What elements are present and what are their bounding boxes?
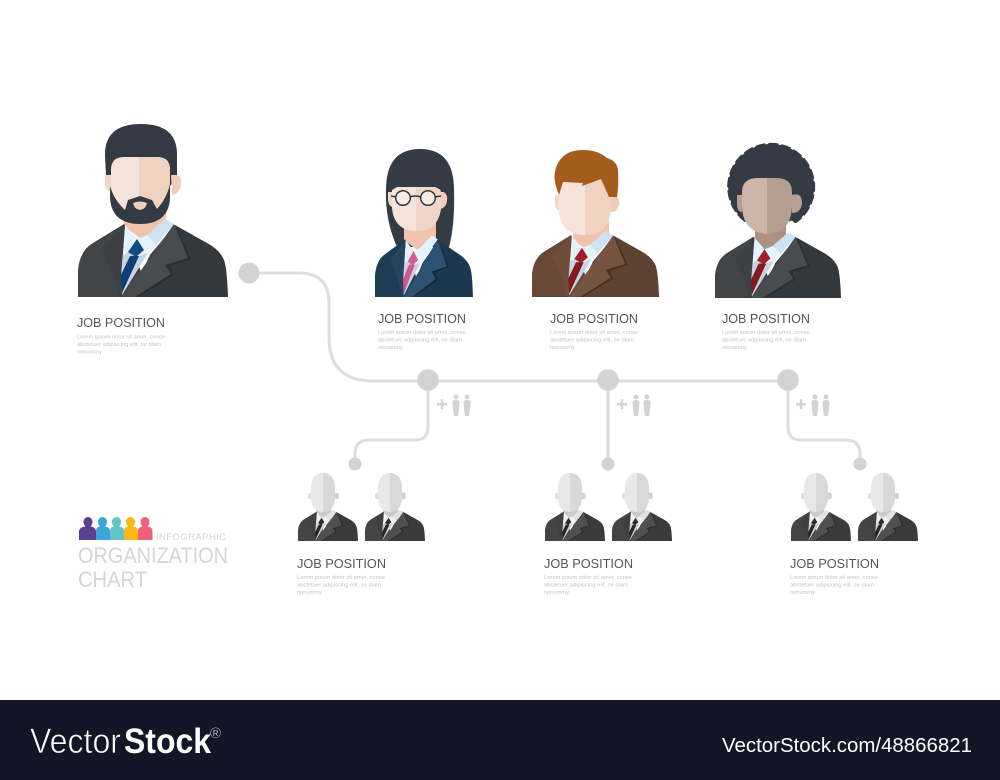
label: manager job position: Lorem ipsum dolor sit amet, conse: [77, 334, 165, 340]
label: woman job position: [378, 311, 466, 351]
label: team 3 job position: [790, 556, 879, 596]
label: afro man job position: nonummy.: [722, 345, 748, 351]
label: manager job position: nonummy.: [77, 350, 103, 356]
avatar: woman with glasses: [375, 149, 473, 297]
label: team 3 job position: nonummy.: [790, 590, 816, 596]
label: team 3 job position: JOB POSITION: [790, 556, 879, 571]
connector lines and nodes: [238, 262, 866, 470]
icon: add two people, right branch: [796, 394, 830, 416]
footer logo: Stock: [124, 722, 211, 761]
label: manager job position: JOB POSITION: [77, 315, 165, 330]
label: team 1 job position: JOB POSITION: [297, 556, 386, 571]
label: team 2 job position: abctetuer adipiscing elit, se diam: [544, 582, 628, 588]
label: team 1 job position: Lorem ipsum dolor sit amet, conse: [297, 575, 385, 581]
label: team 1 job position: abctetuer adipiscing elit, se diam: [297, 582, 381, 588]
label: afro man job position: Lorem ipsum dolor sit amet, conse: [722, 330, 810, 336]
label: brown suit job position: abctetuer adipiscing elit, se diam: [550, 338, 634, 344]
label: afro man job position: [722, 311, 810, 351]
label: brown suit job position: JOB POSITION: [550, 311, 638, 326]
footer logo: Vector: [30, 722, 121, 761]
title: organization chart: [78, 532, 228, 592]
label: brown suit job position: nonummy.: [550, 345, 576, 351]
icon: five colourful people: [79, 517, 152, 540]
avatar: bearded manager: [78, 124, 228, 297]
label: team 1 job position: [297, 556, 386, 596]
avatar: man with red hair and brown suit: [532, 150, 659, 297]
label: afro man job position: JOB POSITION: [722, 311, 810, 326]
label: brown suit job position: Lorem ipsum dolor sit amet, conse: [550, 330, 638, 336]
label: afro man job position: abctetuer adipiscing elit, se diam: [722, 338, 806, 344]
avatar: man with afro hair: [715, 144, 841, 298]
label: team 2 job position: Lorem ipsum dolor sit amet, conse: [544, 575, 632, 581]
team 3: two grey staff avatars: [791, 473, 918, 541]
label: woman job position: abctetuer adipiscing elit, se diam: [378, 338, 462, 344]
label: woman job position: nonummy.: [378, 345, 404, 351]
title: organization chart: ORGANIZATION: [78, 543, 228, 568]
label: team 3 job position: abctetuer adipiscing elit, se diam: [790, 582, 874, 588]
label: woman job position: JOB POSITION: [378, 311, 466, 326]
team 1: two grey staff avatars: [298, 473, 425, 541]
footer bar: [0, 700, 1000, 780]
label: brown suit job position: [550, 311, 638, 351]
team 2: two grey staff avatars: [545, 473, 672, 541]
label: team 2 job position: JOB POSITION: [544, 556, 633, 571]
footer image id: VectorStock.com/48866821: [722, 735, 972, 757]
label: manager job position: [77, 315, 165, 356]
label: woman job position: Lorem ipsum dolor sit amet, conse: [378, 330, 466, 336]
label: team 3 job position: Lorem ipsum dolor sit amet, conse: [790, 575, 878, 581]
label: team 2 job position: [544, 556, 633, 596]
footer logo: [30, 722, 221, 761]
title: organization chart: CHART: [78, 567, 147, 592]
label: team 2 job position: nonummy.: [544, 590, 570, 596]
title: organization chart: INFOGRAPHIC: [156, 532, 226, 543]
label: team 1 job position: nonummy.: [297, 590, 323, 596]
icon: add two people, middle branch: [617, 394, 650, 416]
icon: add two people, left branch: [437, 394, 470, 416]
footer logo: ®: [210, 725, 221, 742]
label: manager job position: abctetuer adipiscing elit, se diam: [77, 342, 161, 348]
